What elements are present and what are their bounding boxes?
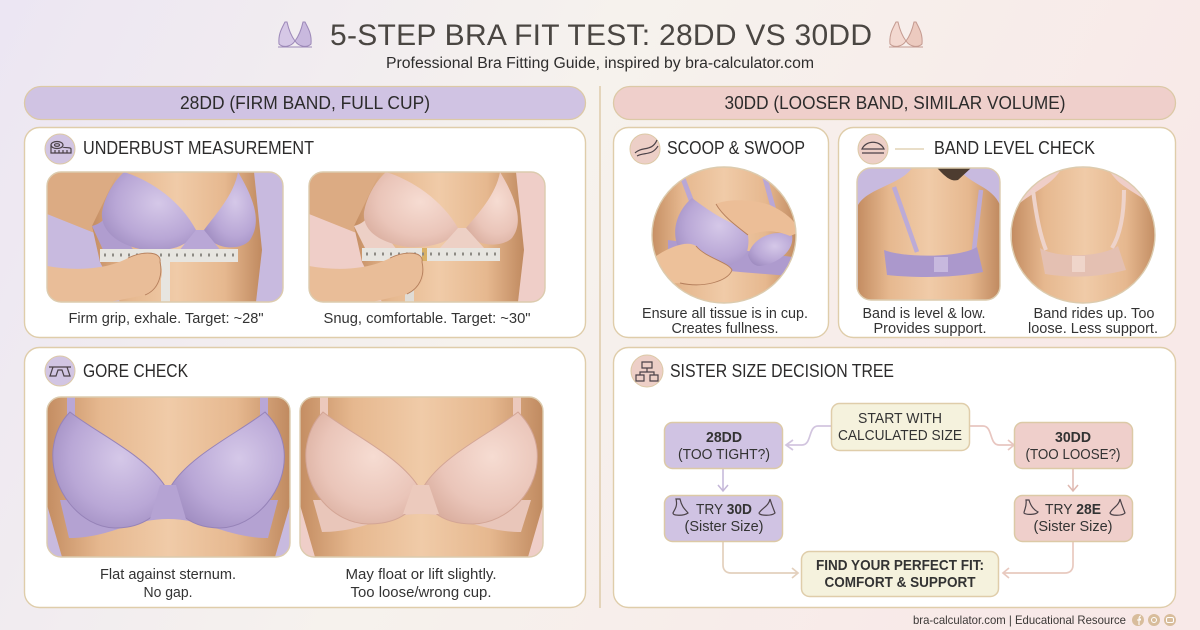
box: 30DD too loose: (TOO LOOSE?) bbox=[1026, 446, 1120, 463]
heading: SISTER SIZE DECISION TREE bbox=[670, 360, 894, 381]
panel: scoop and swoop bbox=[614, 128, 828, 338]
box: 28DD too tight: (TOO TIGHT?) bbox=[678, 446, 770, 463]
photo: 28DD gore bbox=[47, 397, 290, 557]
icon: scoop bbox=[630, 134, 660, 164]
caption: Too loose/wrong cup. bbox=[350, 584, 492, 601]
panel: gore check bbox=[24, 348, 586, 608]
box: find your perfect fit bbox=[802, 552, 998, 596]
caption bbox=[100, 566, 236, 601]
icon: lavender bra bbox=[278, 22, 312, 47]
icon: tape measure bbox=[45, 134, 75, 164]
heading: UNDERBUST MEASUREMENT bbox=[83, 137, 314, 158]
box: try 28E: TRY 28E bbox=[1045, 501, 1101, 518]
caption bbox=[1028, 305, 1158, 337]
box: 28DD too tight bbox=[664, 422, 782, 468]
caption bbox=[862, 305, 986, 337]
box: find your perfect fit: COMFORT & SUPPORT bbox=[824, 574, 976, 591]
photo: 28DD tape measure bbox=[47, 172, 283, 302]
box: try 30D: TRY 30D bbox=[696, 501, 752, 518]
footer credit: bra-calculator.com | Educational Resource bbox=[913, 613, 1126, 627]
photo: 30DD tape measure bbox=[309, 172, 545, 302]
box: 30DD too loose bbox=[1014, 422, 1132, 468]
icon: instagram bbox=[1148, 614, 1160, 626]
heading: 30DD column: 30DD (LOOSER BAND, SIMILAR VOLUME) bbox=[724, 93, 1066, 113]
caption: Ensure all tissue is in cup. bbox=[642, 305, 808, 322]
icon: pink bra bbox=[889, 22, 923, 47]
arrow: 28DD to 30D bbox=[718, 468, 728, 491]
icon: band level bbox=[858, 134, 924, 164]
caption bbox=[346, 566, 496, 601]
heading: GORE CHECK bbox=[83, 360, 189, 381]
heading: 30DD column bbox=[614, 86, 1176, 120]
box: find your perfect fit: FIND YOUR PERFECT FIT: bbox=[816, 557, 984, 574]
caption: loose. Less support. bbox=[1028, 320, 1158, 337]
caption bbox=[642, 305, 808, 337]
title: 5-STEP BRA FIT TEST: 28DD VS 30DD bbox=[330, 19, 872, 52]
icon: video bbox=[1164, 614, 1176, 626]
heading: 28DD column bbox=[24, 86, 586, 120]
box: start with calculated size bbox=[832, 404, 970, 450]
arrow: 28E to result bbox=[1003, 541, 1073, 578]
caption: Band is level & low. bbox=[862, 305, 986, 322]
box: 30DD too loose: 30DD bbox=[1055, 429, 1091, 446]
arrow: 30D to result bbox=[723, 541, 798, 578]
box: 28DD too tight: 28DD bbox=[706, 429, 742, 446]
caption: Snug, comfortable. Target: ~30" bbox=[324, 310, 530, 327]
photo: scoop and swoop bbox=[652, 168, 796, 302]
arrow: 30DD to 28E bbox=[1068, 468, 1078, 491]
icon: gore bbox=[45, 356, 75, 386]
caption: May float or lift slightly. bbox=[346, 566, 496, 583]
panel: band level check bbox=[838, 128, 1176, 338]
box: try 30D bbox=[664, 496, 782, 542]
panel: sister size decision tree bbox=[614, 348, 1176, 608]
caption: Band rides up. Too bbox=[1034, 305, 1154, 322]
caption: Provides support. bbox=[874, 320, 986, 337]
heading: 28DD column: 28DD (FIRM BAND, FULL CUP) bbox=[180, 93, 430, 113]
arrow: start to 30DD bbox=[970, 426, 1014, 450]
caption: Creates fullness. bbox=[672, 320, 778, 337]
panel: underbust measurement bbox=[24, 128, 586, 338]
caption: No gap. bbox=[144, 584, 192, 601]
caption: Flat against sternum. bbox=[100, 566, 236, 583]
box: try 30D: (Sister Size) bbox=[684, 518, 764, 535]
icon: facebook bbox=[1132, 614, 1144, 626]
caption: Firm grip, exhale. Target: ~28" bbox=[68, 310, 264, 327]
photo: riding band, back view bbox=[1010, 165, 1160, 305]
photo: 30DD gore bbox=[300, 397, 543, 557]
heading: BAND LEVEL CHECK bbox=[934, 137, 1096, 158]
box: start with calculated size: START WITH bbox=[858, 410, 942, 427]
box: start with calculated size: CALCULATED SIZE bbox=[838, 427, 962, 444]
heading: SCOOP & SWOOP bbox=[667, 137, 805, 158]
column divider bbox=[599, 86, 601, 608]
photo: level band, back view bbox=[857, 168, 1000, 300]
subtitle: Professional Bra Fitting Guide, inspired by bra-calculator.com bbox=[386, 55, 814, 72]
icon: flowchart bbox=[631, 355, 663, 387]
box: try 28E: (Sister Size) bbox=[1034, 518, 1112, 535]
box: try 28E bbox=[1014, 496, 1132, 542]
arrow: start to 28DD bbox=[786, 426, 831, 450]
